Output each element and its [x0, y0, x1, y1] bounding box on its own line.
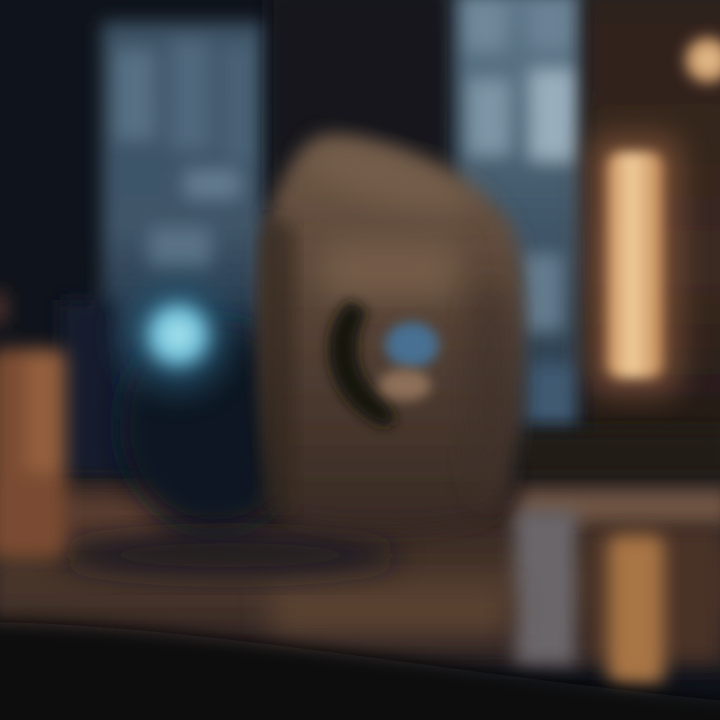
- table shadow: [60, 533, 400, 577]
- foreground dark edge: [0, 622, 720, 720]
- right window: [454, 0, 584, 430]
- dark central column: [268, 0, 453, 210]
- sack face: dark crescent: [329, 300, 395, 426]
- sack face: pale chin: [379, 369, 431, 401]
- sack face: blue eye: [385, 322, 439, 368]
- dark sphere: [120, 320, 310, 530]
- glowing light bar: [590, 135, 680, 395]
- table surface: [0, 480, 720, 670]
- left window: [60, 22, 267, 482]
- left orange object: [0, 292, 66, 558]
- table reflections: [270, 510, 720, 685]
- ceiling lamp: [678, 30, 720, 90]
- blue glow: [123, 277, 233, 393]
- stone sack: [259, 133, 523, 530]
- right wall: [585, 0, 720, 460]
